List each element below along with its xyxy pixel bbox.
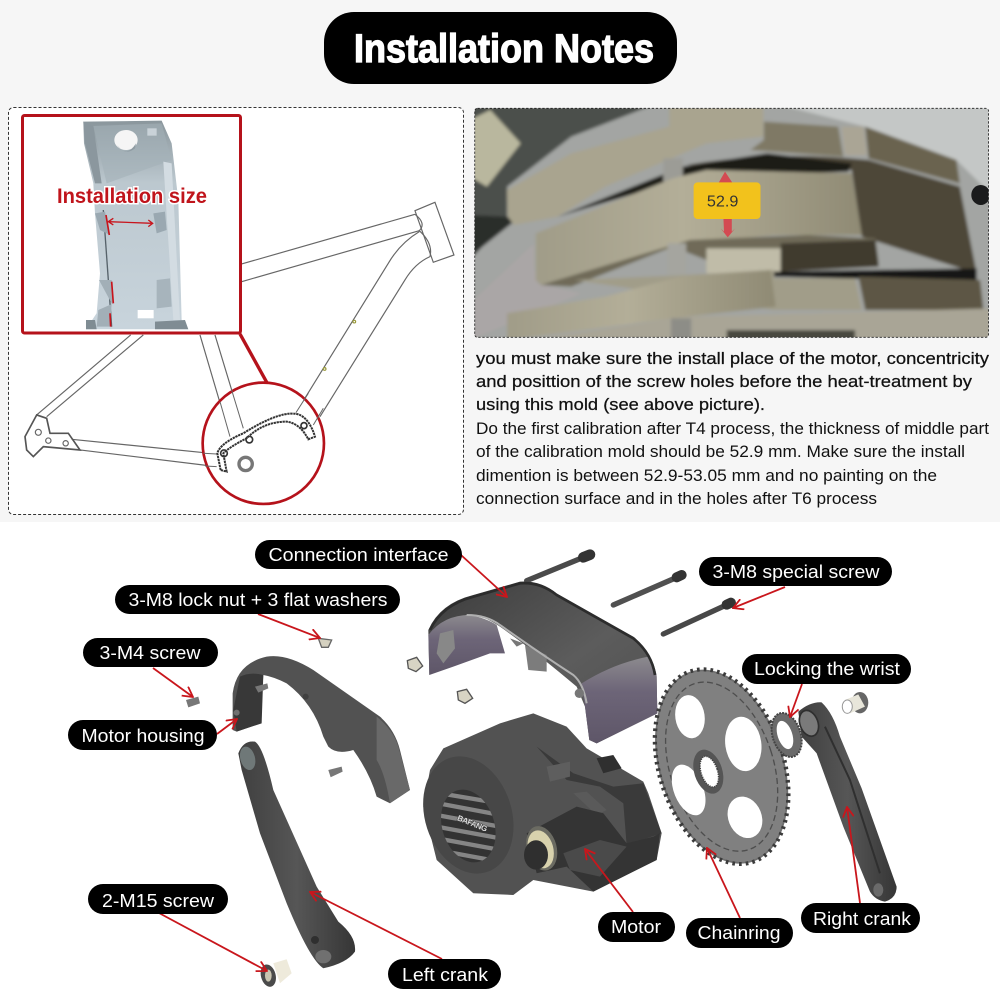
chainring (632, 652, 811, 881)
exploded view: right side parts (407, 555, 897, 902)
label: left crank: Left crank (402, 964, 489, 985)
label: locking the wrist: Locking the wrist (754, 658, 900, 679)
calibration note: dimention is between 52.9-53.05 mm and no painting on the (476, 467, 937, 485)
left crank end holes (237, 745, 331, 963)
bicycle frame line drawing (25, 202, 454, 467)
label: chainring: Chainring (698, 922, 780, 943)
label: connection interface: Connection interface (268, 544, 448, 565)
bold note (476, 349, 990, 414)
label: M15 screw (88, 884, 228, 914)
exploded view: left side parts (186, 638, 410, 988)
right crank bolt (842, 692, 868, 713)
magnifier circle (203, 334, 324, 504)
M15 screw (258, 959, 292, 988)
mount part render (83, 121, 188, 329)
long screws (527, 555, 731, 634)
label: special screw (699, 557, 892, 586)
calibration note (476, 420, 989, 508)
calibration note: connection surface and in the holes after T6 process (476, 490, 877, 508)
label: M4 screw (83, 638, 218, 667)
arrows (153, 555, 860, 971)
label: right crank: Right crank (813, 908, 912, 929)
bold note: you must make sure the install place of the motor, concentricity (476, 349, 990, 368)
label: motor: Motor (611, 916, 661, 937)
panel: frame diagram (8, 108, 464, 514)
label: lock nut: 3-M8 lock nut + 3 flat washers (128, 589, 388, 610)
yellow 52.9 tag: 52.9 (707, 193, 738, 211)
motor (409, 713, 662, 895)
small screws (186, 683, 343, 777)
label: right crank (801, 903, 920, 933)
title (324, 12, 677, 84)
connection cover (428, 581, 657, 743)
label: lock nut (115, 585, 400, 614)
label: left crank (388, 959, 501, 989)
lock nut (318, 638, 332, 647)
title: Installation Notes (354, 27, 654, 71)
label: motor housing: Motor housing (82, 725, 204, 746)
label: installation size: Installation size (57, 184, 207, 208)
bold note: and posittion of the screw holes before the heat-treatment by (476, 372, 973, 391)
text block: installation instructions (476, 349, 990, 508)
label: locking the wrist (742, 654, 911, 684)
inset: installation size (22, 116, 240, 333)
left crank (238, 741, 355, 968)
label: motor (598, 912, 675, 942)
label: M4 screw: 3-M4 screw (100, 642, 201, 663)
locking ring (766, 709, 807, 761)
label: motor housing (68, 720, 217, 750)
brand text: BAFANG (456, 813, 489, 834)
label: chainring (686, 918, 793, 948)
yellow 52.9 tag (694, 182, 761, 219)
label: connection interface (255, 540, 462, 569)
motor housing arch (233, 656, 410, 803)
chainring holes (665, 693, 768, 843)
right crank (796, 702, 897, 902)
labels (68, 540, 920, 989)
label: M15 screw: 2-M15 screw (102, 890, 215, 911)
calibration note: Do the first calibration after T4 process, the thickness of middle part (476, 420, 989, 438)
panel: calibration mold photo (470, 100, 997, 343)
label: special screw: 3-M8 special screw (712, 561, 880, 582)
calibration note: of the calibration mold should be 52.9 mm. Make sure the install (476, 443, 965, 461)
nuts (407, 657, 473, 703)
bold note: using this mold (see above picture). (476, 395, 765, 414)
